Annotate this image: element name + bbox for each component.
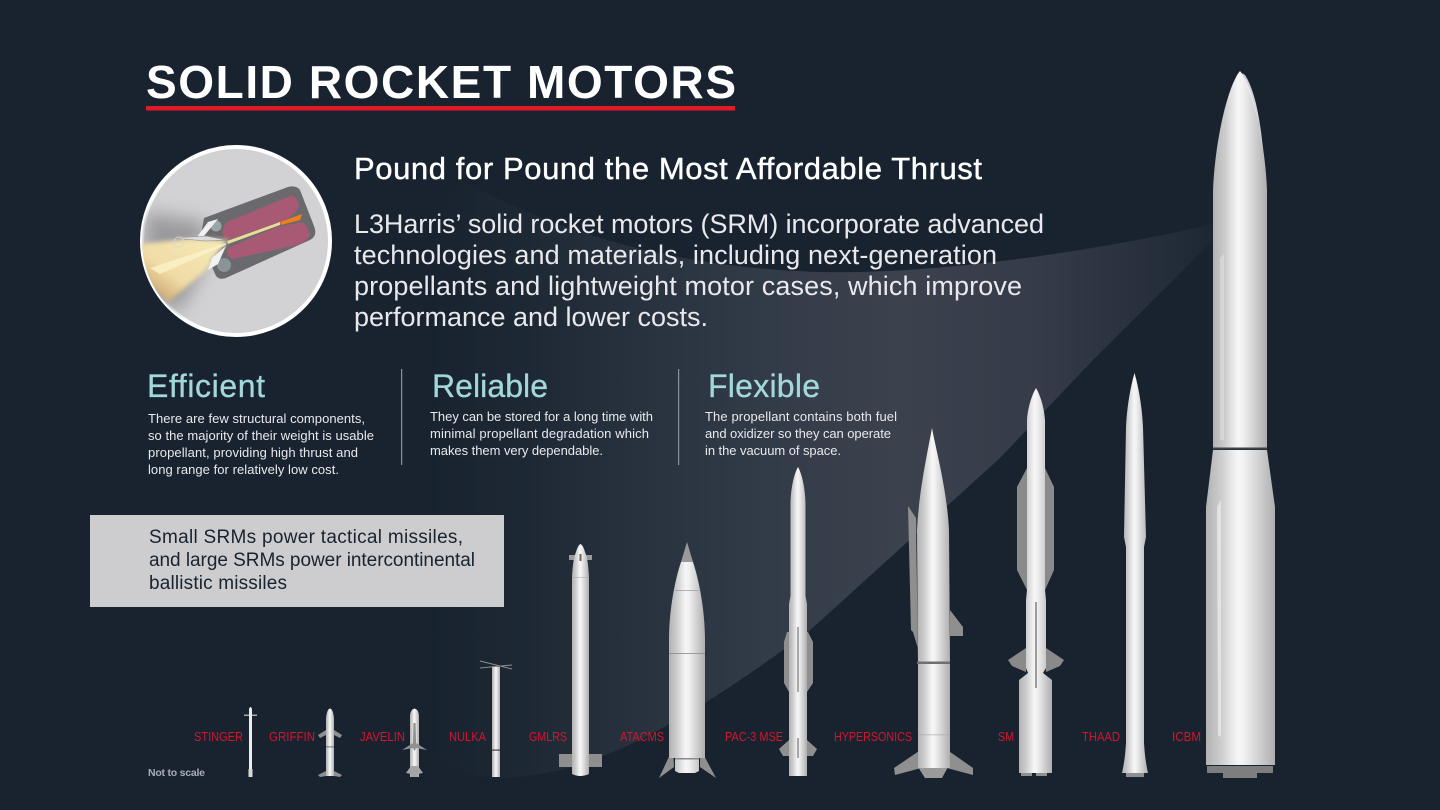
rocket: THAAD [1122,373,1148,777]
rocket: SM [1008,388,1064,776]
note: not to scale: Not to scale [148,767,205,779]
rocket: Hypersonics [894,428,973,778]
intro paragraph: L3Harris’ solid rocket motors (SRM) incorporate advanced [354,209,1044,239]
callout: small and large SRMs: Small SRMs power tactical missiles, [149,527,463,548]
heading: pound for pound: Pound for Pound the Most Affordable Thrust [354,151,982,186]
column: efficient: so the majority of their weight is usable [148,428,374,443]
rocket name labels [194,730,1201,744]
column: reliable: minimal propellant degradation which [430,426,649,441]
callout: small and large SRMs [90,515,504,607]
rocket: Griffin [318,708,342,777]
rocket: ICBM [1206,71,1275,778]
column: efficient: Efficient [147,368,265,404]
column: reliable: They can be stored for a long time with [430,409,653,424]
rocket name labels: HYPERSONICS [834,730,912,744]
column: flexible [705,368,897,458]
rocket name labels: STINGER [194,730,243,744]
rocket name labels: THAAD [1082,730,1120,744]
rocket name labels: GRIFFIN [269,730,315,744]
rocket name labels: GMLRS [529,730,567,744]
rocket name labels: PAC-3 MSE [725,730,783,744]
rocket: GMLRS [559,544,602,776]
rocket name labels: ICBM [1172,730,1201,744]
column: efficient: propellant, providing high thrust and [148,445,358,460]
intro paragraph: performance and lower costs. [354,302,708,332]
rocket name labels: SM [998,730,1014,744]
column: reliable [430,368,653,458]
rocket name labels: ATACMS [620,730,664,744]
column: flexible: Flexible [708,368,820,404]
rocket: Stinger [244,707,257,777]
column: reliable: Reliable [432,368,548,404]
column: efficient: long range for relatively low cost. [148,462,339,477]
callout: small and large SRMs: ballistic missiles [149,573,287,594]
column: efficient [147,368,374,477]
column: efficient: There are few structural components, [148,411,365,426]
rocket: ATACMS [659,542,716,778]
column: flexible: and oxidizer so they can operate [705,426,891,441]
rocket: Nulka [480,661,512,777]
rocket name labels: NULKA [449,730,487,744]
icon: cutaway rocket motor in circle [140,147,330,335]
column: flexible: The propellant contains both fuel [705,409,897,424]
rocket: PAC-3 MSE [779,467,817,776]
title: SOLID ROCKET MOTORS [146,56,736,108]
intro paragraph: technologies and materials, including next-generation [354,240,997,270]
callout: small and large SRMs: and large SRMs power intercontinental [149,550,475,571]
rocket: Javelin [402,708,427,777]
intro paragraph [354,209,1044,332]
light beam from ICBM [369,178,1213,778]
intro paragraph: propellants and lightweight motor cases, which improve [354,271,1022,301]
rocket name labels: JAVELIN [360,730,405,744]
column: flexible: in the vacuum of space. [705,443,841,458]
column: reliable: makes them very dependable. [430,443,603,458]
